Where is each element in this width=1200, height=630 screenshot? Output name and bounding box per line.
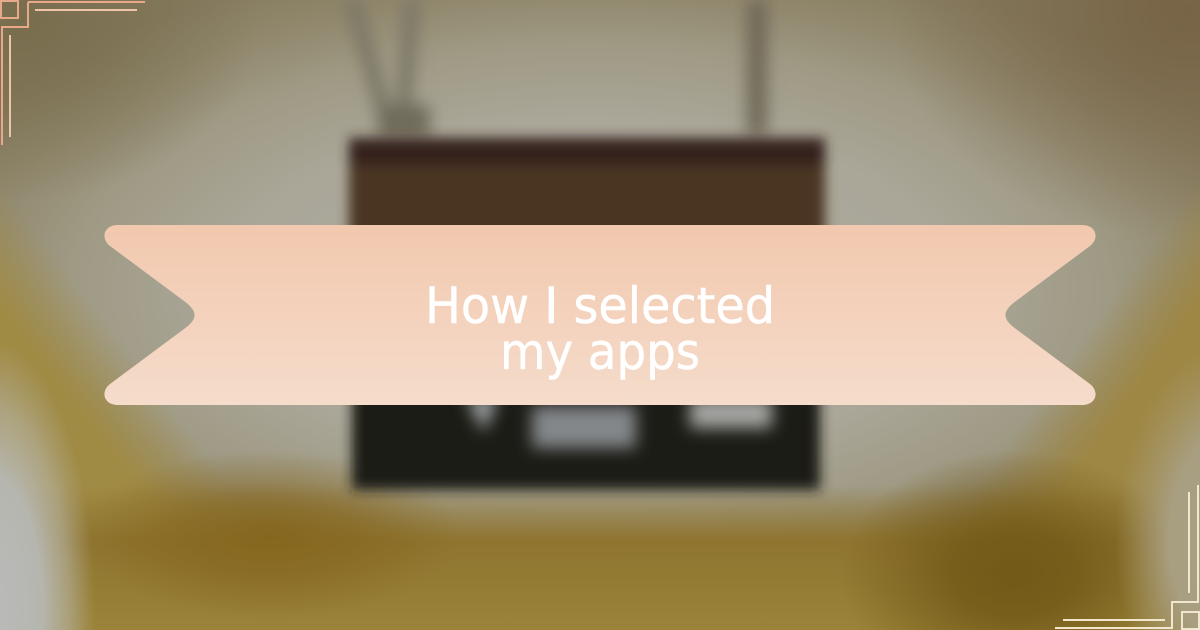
ribbon banner <box>104 225 1096 405</box>
hanging sign <box>349 0 825 490</box>
corner ornament: bottom right <box>1055 485 1199 629</box>
title: How I selected <box>425 277 775 335</box>
title second line: my apps <box>500 323 700 381</box>
corner ornament: top left <box>1 1 145 145</box>
